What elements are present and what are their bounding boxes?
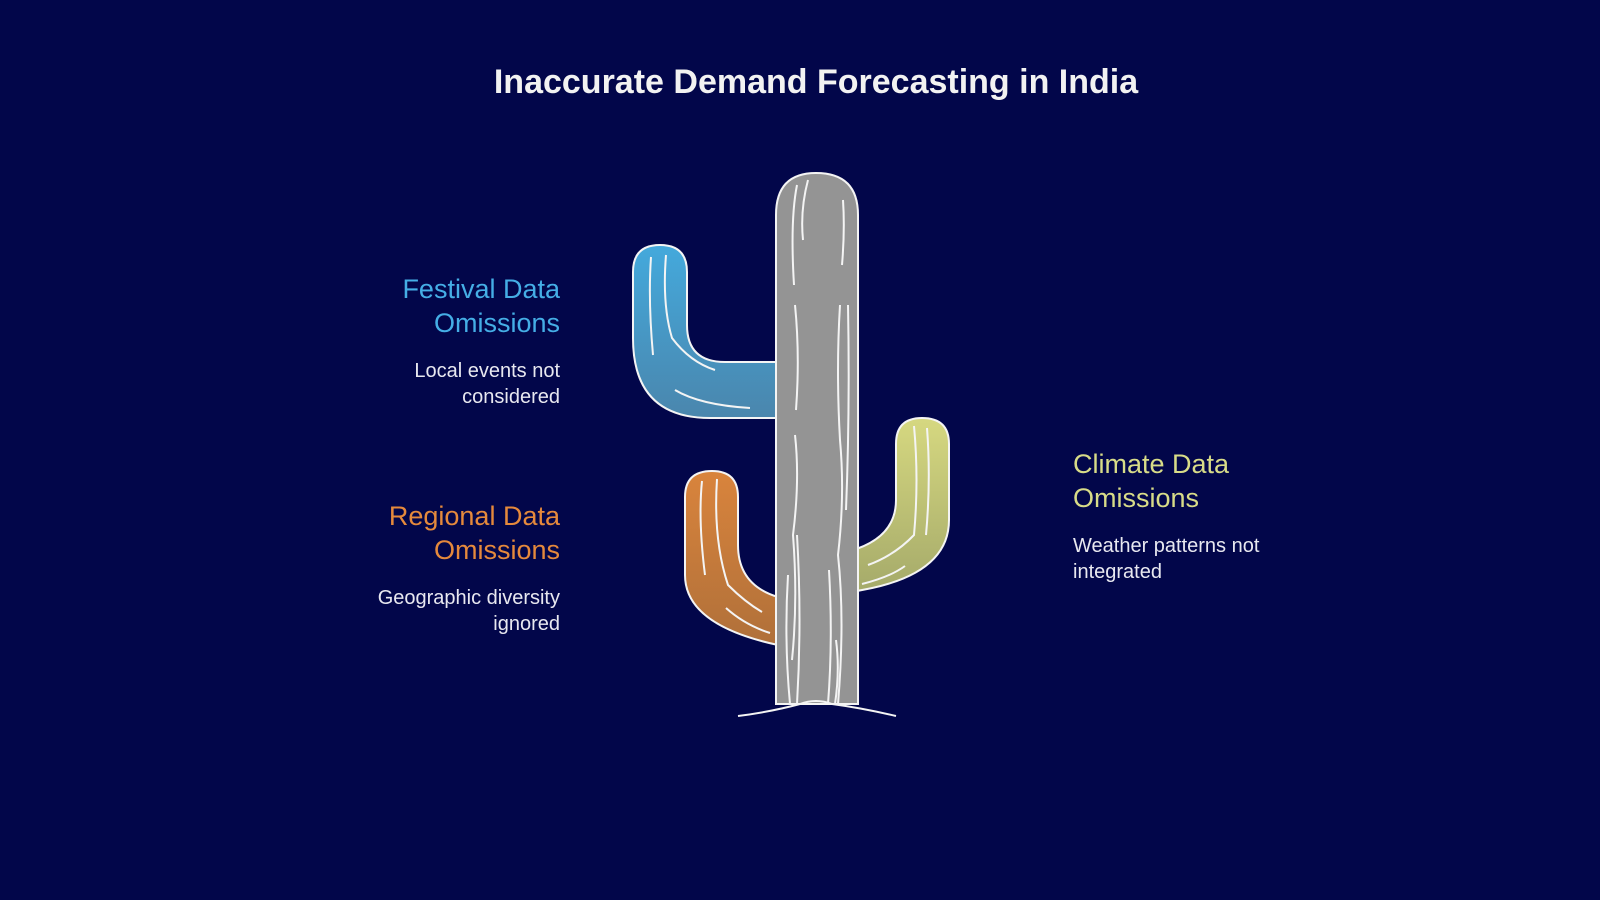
label: festival: Festival Data — [402, 274, 560, 304]
label: climate: integrated — [1073, 561, 1162, 583]
label: festival: Local events not — [414, 360, 560, 382]
label: climate: Climate Data — [1073, 449, 1229, 479]
label: regional: Regional Data — [389, 501, 560, 531]
label: festival — [402, 274, 560, 408]
label: festival: considered — [462, 386, 560, 408]
label: regional: Omissions — [434, 535, 560, 565]
label: regional: ignored — [493, 613, 560, 635]
green arm — [850, 418, 949, 592]
label: regional — [378, 501, 560, 635]
label: festival: Omissions — [434, 308, 560, 338]
label: regional: Geographic diversity — [378, 587, 560, 609]
label: climate: Weather patterns not — [1073, 535, 1259, 557]
label: climate: Omissions — [1073, 483, 1199, 513]
orange arm — [685, 471, 778, 645]
title: Inaccurate Demand Forecasting in India — [494, 63, 1138, 101]
trunk — [738, 173, 896, 716]
blue arm — [633, 245, 778, 418]
label: climate — [1073, 449, 1260, 583]
